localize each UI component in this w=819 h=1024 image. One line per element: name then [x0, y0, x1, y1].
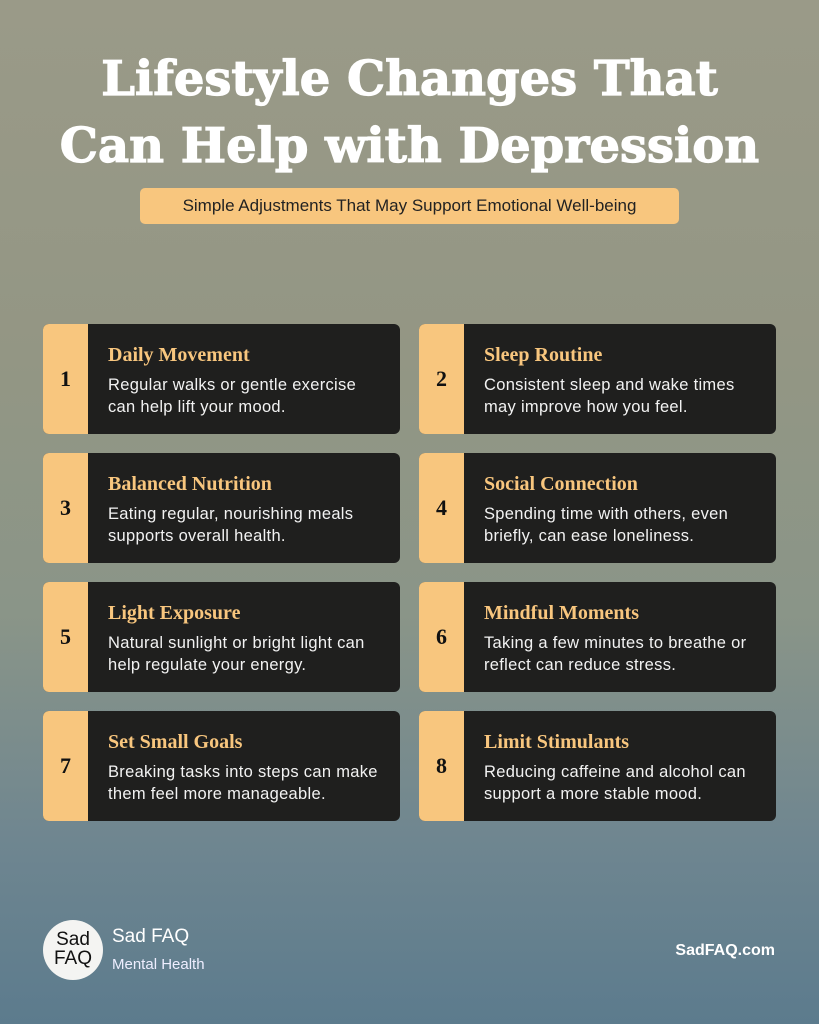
- card 1: Regular walks or gentle exercise can help lift your mood.: [108, 376, 356, 416]
- card 8: Reducing caffeine and alcohol can support a more stable mood.: [484, 763, 746, 803]
- card 8: 8: [436, 753, 447, 778]
- card 6: Taking a few minutes to breathe or reflect can reduce stress.: [484, 634, 746, 674]
- card 4: [419, 453, 776, 563]
- logo: FAQ: [54, 948, 92, 969]
- card 1: Daily Movement: [108, 344, 250, 366]
- card 7: Breaking tasks into steps can make them feel more manageable.: [108, 763, 378, 803]
- card 2: Consistent sleep and wake times may improve how you feel.: [484, 376, 735, 416]
- card 6: 6: [436, 624, 447, 649]
- card 3: Eating regular, nourishing meals supports overall health.: [108, 505, 353, 545]
- card 7: 7: [60, 753, 71, 778]
- card 3: 3: [60, 495, 71, 520]
- logo: [43, 920, 103, 980]
- brand text: [112, 926, 205, 973]
- card 7: Set Small Goals: [108, 731, 242, 753]
- brand text: Sad FAQ: [112, 926, 189, 947]
- subtitle pill: Simple Adjustments That May Support Emotional Well-being: [183, 196, 636, 215]
- card 1: 1: [60, 366, 71, 391]
- card 8: Limit Stimulants: [484, 731, 629, 753]
- subtitle pill: [140, 188, 679, 224]
- card 3: Balanced Nutrition: [108, 473, 272, 495]
- card 6: [419, 582, 776, 692]
- card 2: 2: [436, 366, 447, 391]
- title: Lifestyle Changes That: [101, 51, 718, 107]
- logo: Sad: [56, 929, 90, 950]
- card 7: [43, 711, 400, 821]
- card 6: Mindful Moments: [484, 602, 639, 624]
- card 4: Spending time with others, even briefly, can ease loneliness.: [484, 505, 728, 545]
- card 8: [419, 711, 776, 821]
- card 3: [43, 453, 400, 563]
- card 2: Sleep Routine: [484, 344, 602, 366]
- website: SadFAQ.com: [675, 942, 775, 959]
- card 2: [419, 324, 776, 434]
- card 1: [43, 324, 400, 434]
- card 5: [43, 582, 400, 692]
- card 5: 5: [60, 624, 71, 649]
- card 5: Natural sunlight or bright light can help regulate your energy.: [108, 634, 365, 674]
- card 4: 4: [436, 495, 447, 520]
- title: Can Help with Depression: [60, 118, 759, 174]
- title: [60, 51, 759, 174]
- card 5: Light Exposure: [108, 602, 240, 624]
- card 4: Social Connection: [484, 473, 638, 495]
- brand text: Mental Health: [112, 956, 205, 973]
